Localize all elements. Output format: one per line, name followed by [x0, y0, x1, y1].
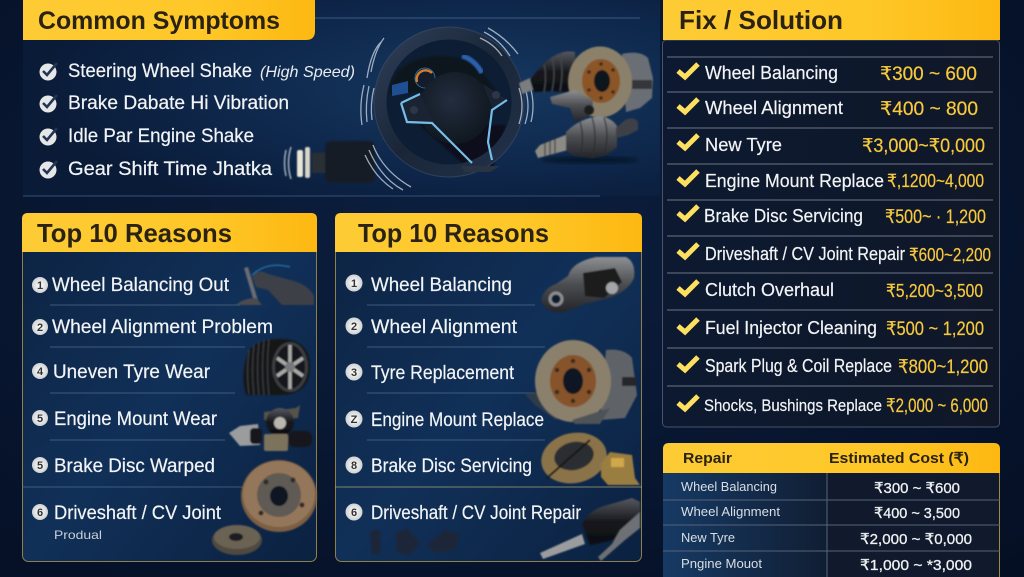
icon: driveshaft [540, 498, 640, 561]
reason list: Wheel Balancing [371, 275, 512, 296]
reason list: Produal [54, 528, 102, 542]
symptom list: Steering Wheel Shake [68, 61, 252, 82]
fix rows with costs: ₹2,000 ~ 6,000 [886, 396, 988, 417]
reason list: Engine Mount Wear [54, 409, 218, 430]
table rows [681, 479, 972, 574]
panel: top 10 reasons middle [335, 213, 642, 562]
table rows: ₹400 ~ 3,500 [874, 505, 960, 522]
reason list: Brake Disc Servicing [371, 456, 532, 477]
heading: common symptoms: Common Symptoms [38, 7, 280, 35]
heading: common symptoms [23, 0, 315, 40]
symptom list: Brake Dabate Hi Vibration [68, 93, 289, 114]
fix rows with costs: Spark Plug & Coil Replace [705, 356, 892, 376]
fix rows with costs: Shocks, Bushings Replace [704, 396, 882, 415]
reason list: 6 [37, 507, 43, 519]
symptom list [40, 61, 355, 180]
fix rows with costs: Engine Mount Replace [705, 171, 884, 191]
fix rows with costs: Driveshaft / CV Joint Repair [705, 244, 905, 264]
panel: fix and solution [662, 0, 1000, 427]
icon: bracket part [541, 257, 634, 312]
reason list: 1 [351, 278, 357, 290]
row dividers [335, 305, 642, 487]
fix rows with costs: ₹800~1,200 [898, 357, 988, 378]
icon: shaking cylinder [284, 141, 375, 183]
reason list: Brake Disc Warped [54, 456, 215, 477]
reason list: 1 [37, 280, 43, 292]
icon: small parts [370, 529, 459, 555]
reason list: Wheel Balancing Out [52, 275, 230, 296]
fix rows with costs: ₹5,200~3,500 [886, 281, 983, 301]
heading: top 10 reasons [335, 213, 642, 252]
table rows: Wheel Balancing [681, 479, 777, 494]
icon: engine mount [229, 405, 312, 451]
reason list: 5 [37, 413, 43, 425]
icon: cv axle boot [519, 51, 576, 94]
reason list: 5 [37, 460, 43, 472]
reason list: 2 [37, 322, 43, 334]
fix rows with costs: Brake Disc Servicing [704, 206, 863, 226]
table header: Repair [683, 450, 732, 467]
fix rows with costs: ₹500~ · 1,200 [885, 207, 986, 228]
fix rows with costs: ₹400 ~ 800 [880, 99, 978, 120]
symptom list: (High Speed) [260, 64, 355, 81]
fix rows with costs: ₹,1200~4,000 [887, 171, 984, 191]
fix rows with costs: ₹500 ~ 1,200 [886, 319, 984, 340]
symptom list: Gear Shift Time Jhatka [68, 159, 272, 180]
reason list [32, 275, 273, 542]
table rows: New Tyre [681, 530, 735, 545]
table rows: Pngine Mouot [681, 556, 762, 571]
icon: brake disc and caliper [568, 46, 653, 118]
icon: worn disc and block [537, 427, 640, 489]
fix rows with costs: Wheel Alignment [705, 98, 843, 118]
reason list: Wheel Alignment Problem [52, 317, 273, 338]
table header: Estimated Cost (₹) [829, 450, 969, 467]
fix rows with costs [678, 63, 991, 417]
reason list: Uneven Tyre Wear [53, 362, 211, 383]
fix rows with costs: ₹300 ~ 600 [880, 64, 977, 85]
fix rows with costs: Clutch Overhaul [705, 280, 834, 300]
row dividers [667, 57, 993, 386]
fix rows with costs: Fuel Injector Cleaning [705, 318, 877, 338]
reason list: 6 [351, 507, 357, 519]
icon: mechanic arm [236, 265, 314, 305]
reason list: 2 [351, 321, 357, 333]
table rows: ₹1,000 ~ *3,000 [860, 557, 972, 574]
heading: fix / solution: Fix / Solution [679, 5, 843, 35]
heading: top 10 reasons [22, 213, 317, 252]
icon: suspension bracket [550, 90, 594, 122]
fix rows with costs: ₹600~2,200 [909, 245, 991, 265]
reason list: Z [351, 414, 358, 426]
reason list: 4 [37, 366, 44, 378]
panel: top 10 reasons left [22, 213, 317, 562]
icon: steering wheel [374, 27, 524, 177]
reason list: 3 [351, 367, 357, 379]
reason list: 8 [351, 460, 357, 472]
symptom list: Idle Par Engine Shake [68, 126, 254, 147]
icon: vibration marks [361, 28, 533, 190]
icon: tyre [243, 339, 310, 395]
reason list: Driveshaft / CV Joint [54, 503, 222, 524]
reason list: Engine Mount Replace [371, 410, 544, 431]
fix rows with costs: Wheel Balancing [705, 63, 838, 83]
table grid [663, 473, 1000, 577]
fix rows with costs: New Tyre [705, 135, 782, 155]
reason list: Driveshaft / CV Joint Repair [371, 503, 582, 524]
row dividers [22, 305, 245, 487]
table rows: Wheel Alignment [681, 504, 780, 519]
icon: rusty disc [212, 460, 317, 555]
table header [663, 443, 1000, 473]
reason list [346, 274, 582, 524]
heading: top 10 reasons: Top 10 Reasons [37, 218, 232, 248]
table rows: ₹300 ~ ₹600 [874, 480, 960, 497]
panel: common symptoms [23, 0, 660, 196]
heading: top 10 reasons: Top 10 Reasons [358, 218, 549, 248]
panel: repair cost table [663, 443, 1000, 577]
icon: brake disc and caliper [525, 340, 637, 424]
heading: fix / solution [663, 0, 1000, 40]
icon: drive axle [535, 116, 638, 164]
table rows: ₹2,000 ~ ₹0,000 [860, 531, 972, 548]
fix rows with costs: ₹3,000~₹0,000 [862, 136, 985, 157]
reason list: Wheel Alignment [371, 317, 518, 338]
reason list: Tyre Replacement [371, 363, 515, 384]
